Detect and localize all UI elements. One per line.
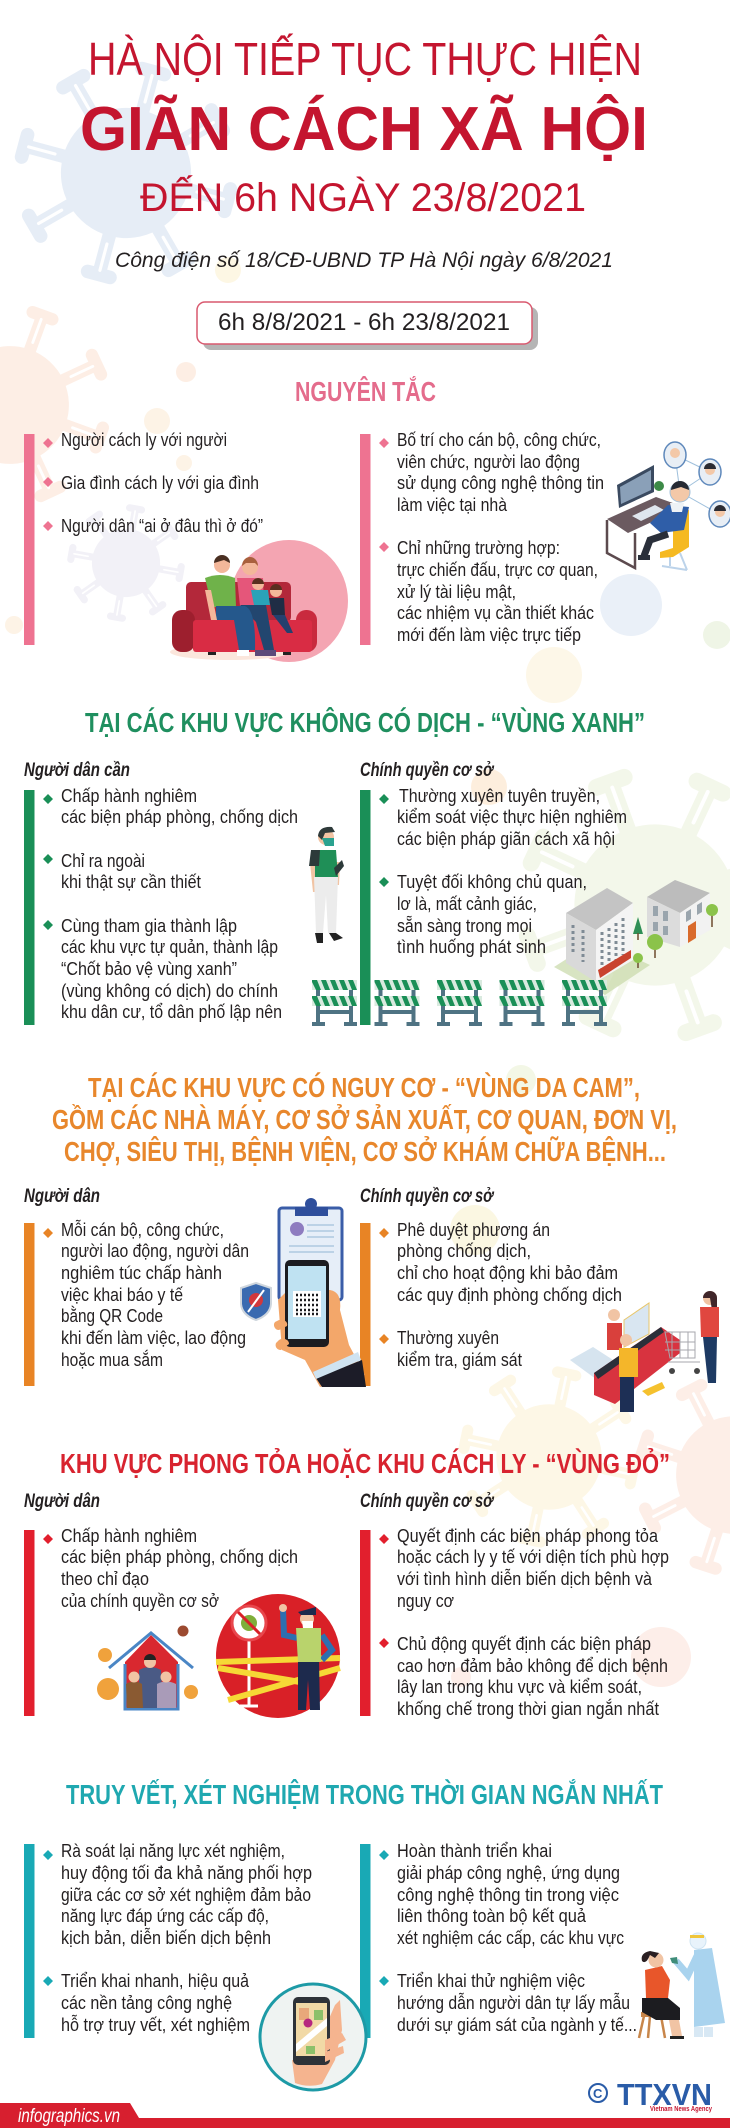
left text: nghiêm túc chấp hành [61, 1263, 222, 1283]
right text: trực chiến đấu, trực cơ quan, [397, 560, 598, 580]
right text: với tình hình diễn biến dịch bệnh và [397, 1568, 653, 1589]
document reference: Công điện số 18/CĐ-UBND TP Hà Nội ngày 6/8/2021 [115, 249, 613, 272]
subheads: Chính quyền cơ sở [360, 1186, 495, 1207]
right text: phòng chống dịch, [397, 1241, 531, 1261]
right text: Chủ động quyết định các biện pháp [397, 1634, 651, 1654]
right text: liên thông toàn bộ kết quả [397, 1906, 587, 1926]
date box [197, 302, 538, 350]
icon: family on sofa [170, 540, 348, 662]
left text [61, 1841, 312, 2035]
bars and bullets [24, 1530, 389, 1716]
right text [397, 1841, 637, 2035]
bars and bullets [24, 790, 389, 1025]
right text: Triển khai thử nghiệm việc [397, 1971, 585, 1991]
footer bar [0, 2103, 730, 2128]
left text: năng lực đáp ứng các cấp độ, [61, 1906, 269, 1926]
left text: theo chỉ đạo [61, 1569, 149, 1589]
right text: sử dụng công nghệ thông tin [397, 473, 604, 493]
right text [397, 430, 604, 645]
right text: các biện pháp giãn cách xã hội [397, 829, 615, 849]
subheads [24, 1491, 495, 1512]
logo: TTXVN: C [593, 2086, 603, 2101]
right text: Chỉ những trường hợp: [397, 538, 560, 558]
left text: các khu vực tự quản, thành lập [61, 937, 278, 957]
left text [61, 1526, 298, 1611]
icon: police lockdown [216, 1594, 340, 1718]
left text: khi đến làm việc, lao động [61, 1328, 246, 1348]
subheads [24, 760, 495, 781]
icon: phone map [260, 1984, 366, 2090]
panel: vùng xanh [24, 706, 718, 1025]
right text: lây lan trong khu vực và kiểm soát, [397, 1677, 642, 1697]
left text: Chấp hành nghiêm [61, 786, 197, 806]
logo: TTXVN: TTXVN [617, 2077, 712, 2112]
right text: công nghệ thông tin trong việc [397, 1885, 619, 1905]
icon: barriers [312, 980, 607, 1024]
title: HÀ NỘI TIẾP TỤC THỰC HIỆN [88, 33, 642, 85]
date box: 6h 8/8/2021 - 6h 23/8/2021 [218, 309, 510, 336]
heading [52, 1072, 677, 1167]
right text: nguy cơ [397, 1591, 454, 1611]
left text: các biện pháp phòng, chống dịch [61, 1547, 298, 1567]
title: ĐẾN 6h NGÀY 23/8/2021 [140, 174, 586, 220]
right text: chỉ cho hoạt động khi bảo đảm [397, 1263, 618, 1283]
left text: “Chốt bảo vệ vùng xanh” [61, 959, 237, 979]
left text: khu dân cư, tổ dân phố lập nên [61, 1002, 282, 1022]
right text: mới đến làm việc trực tiếp [397, 625, 581, 645]
right text: Hoàn thành triển khai [397, 1841, 552, 1861]
panel: vùng đỏ [24, 1447, 670, 1719]
icon: family in house [97, 1626, 198, 1709]
icon: shop checkout [570, 1291, 719, 1412]
right text: các quy định phòng chống dịch [397, 1285, 622, 1305]
right text [397, 1526, 669, 1719]
right text: hướng dẫn người dân tự lấy mẫu [397, 1992, 630, 2013]
left text: khi thật sự cần thiết [61, 872, 201, 892]
subheads: Chính quyền cơ sở [360, 760, 495, 781]
right text: kiểm soát việc thực hiện nghiêm [397, 807, 627, 827]
right text [397, 786, 627, 957]
icon: QR phone and clipboard [241, 1198, 366, 1387]
left text [61, 1219, 249, 1370]
right text: làm việc tại nhà [397, 495, 508, 515]
left text: việc khai báo y tế [61, 1285, 183, 1305]
right text: Phê duyệt phương án [397, 1220, 550, 1240]
icon: buildings [554, 880, 718, 995]
right text: lơ là, mất cảnh giác, [397, 894, 537, 914]
right text: viên chức, người lao động [397, 452, 580, 472]
right text: sẵn sàng trong mọi [397, 916, 532, 936]
panel: nguyên tắc [24, 376, 730, 662]
right text: xử lý tài liệu mật, [397, 582, 516, 602]
subheads: Chính quyền cơ sở [360, 1491, 495, 1512]
left text: bằng QR Code [61, 1305, 163, 1326]
right text: kiểm tra, giám sát [397, 1350, 522, 1370]
right text: tình huống phát sinh [397, 937, 546, 957]
panel: vùng da cam [24, 1072, 719, 1412]
right text: hoặc cách ly y tế với diện tích phù hợp [397, 1547, 669, 1567]
icon: remote worker [607, 442, 730, 570]
left text: của chính quyền cơ sở [61, 1591, 219, 1611]
left text: Gia đình cách ly với gia đình [61, 473, 259, 493]
left text: (vùng không có dịch) do chính [61, 981, 278, 1001]
heading: NGUYÊN TẮC [295, 376, 436, 407]
icon: masked person [309, 827, 344, 943]
right text: cao hơn đảm bảo không để dịch bệnh [397, 1656, 668, 1676]
left text: các nền tảng công nghệ [61, 1993, 232, 2013]
right text: Tuyệt đối không chủ quan, [397, 872, 587, 892]
right text: Thường xuyên tuyên truyền, [399, 786, 600, 806]
subheads: Người dân [24, 1491, 100, 1512]
left text: Chỉ ra ngoài [61, 851, 145, 871]
right text: giải pháp công nghệ, ứng dụng [397, 1863, 620, 1883]
title: GIÃN CÁCH XÃ HỘI [80, 95, 648, 164]
right text: Bố trí cho cán bộ, công chức, [397, 430, 601, 450]
left text: hỗ trợ truy vết, xét nghiệm [61, 2014, 250, 2035]
subheads: Người dân [24, 1186, 100, 1207]
left text: Người dân “ai ở đâu thì ở đó” [61, 516, 263, 536]
right text: Quyết định các biện pháp phong tỏa [397, 1526, 659, 1546]
left text [61, 786, 298, 1022]
right text: khống chế trong thời gian ngắn nhất [397, 1698, 659, 1719]
subheads [24, 1186, 495, 1207]
left text: Triển khai nhanh, hiệu quả [61, 1971, 250, 1991]
left text: Mỗi cán bộ, công chức, [61, 1219, 224, 1240]
left text: Người cách ly với người [61, 430, 227, 450]
left text: giữa các cơ sở xét nghiệm đảm bảo [61, 1885, 311, 1905]
left text [61, 430, 263, 536]
left text: người lao động, người dân [61, 1241, 249, 1261]
right text [397, 1220, 622, 1370]
left text: các biện pháp phòng, chống dịch [61, 807, 298, 827]
right text: dưới sự giám sát của ngành y tế... [397, 2015, 637, 2035]
left text: hoặc mua sắm [61, 1349, 163, 1370]
bars and bullets [24, 1223, 389, 1386]
left text: huy động tối đa khả năng phối hợp [61, 1863, 312, 1883]
left text: Rà soát lại năng lực xét nghiệm, [61, 1841, 285, 1861]
left bar and bullets [24, 434, 389, 645]
bars and bullets [24, 1844, 389, 2038]
background viruses and dots [0, 44, 730, 1687]
footer bar: infographics.vn [18, 2106, 120, 2127]
left text: Cùng tham gia thành lập [61, 916, 237, 936]
left text: kịch bản, diễn biến dịch bệnh [61, 1927, 271, 1948]
left text: Chấp hành nghiêm [61, 1526, 197, 1546]
icon: nasal swab test [639, 1933, 725, 2039]
right text: các nhiệm vụ cần thiết khác [397, 603, 594, 623]
subheads: Người dân cần [24, 760, 130, 781]
title [80, 33, 648, 220]
right text: xét nghiệm các cấp, các khu vực [397, 1928, 624, 1948]
panel: truy vết [24, 1779, 725, 2090]
logo: TTXVN: Vietnam News Agency [650, 2106, 712, 2113]
right text: Thường xuyên [397, 1328, 499, 1348]
